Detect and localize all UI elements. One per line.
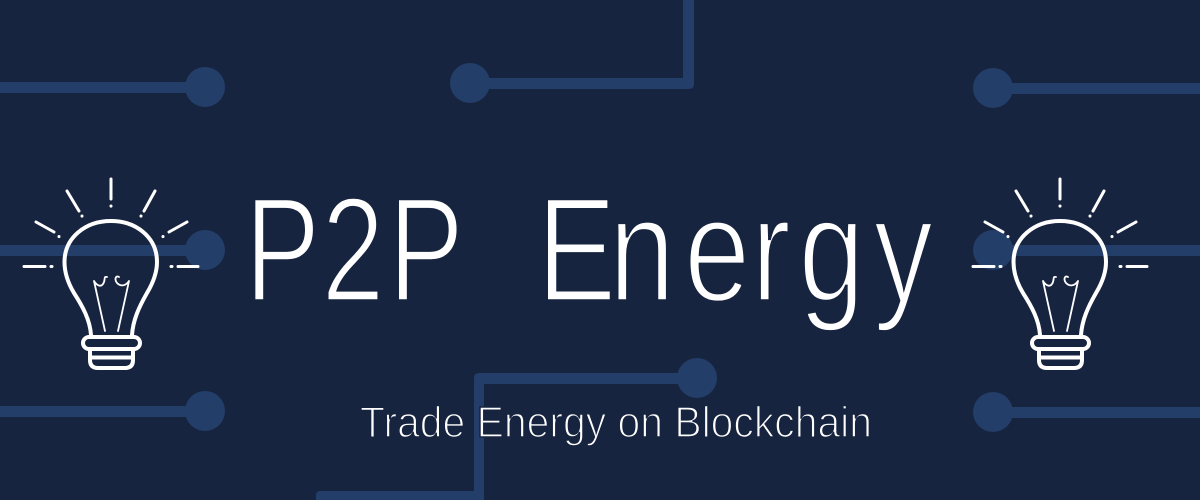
trace: top center	[450, 0, 694, 103]
trace: middle left	[0, 230, 225, 270]
trace: top left	[0, 67, 225, 107]
icon: right light bulb	[973, 179, 1147, 368]
trace: bottom center	[316, 358, 717, 500]
trace: bottom right	[973, 392, 1200, 432]
title: P2P	[245, 167, 464, 334]
title	[245, 166, 934, 334]
subtitle: Trade Energy on Blockchain	[360, 398, 872, 447]
trace: middle right	[973, 230, 1200, 270]
trace: top right	[973, 68, 1200, 108]
trace: bottom left	[0, 391, 225, 431]
title: Energy	[537, 166, 934, 333]
icon: left light bulb	[24, 179, 198, 368]
